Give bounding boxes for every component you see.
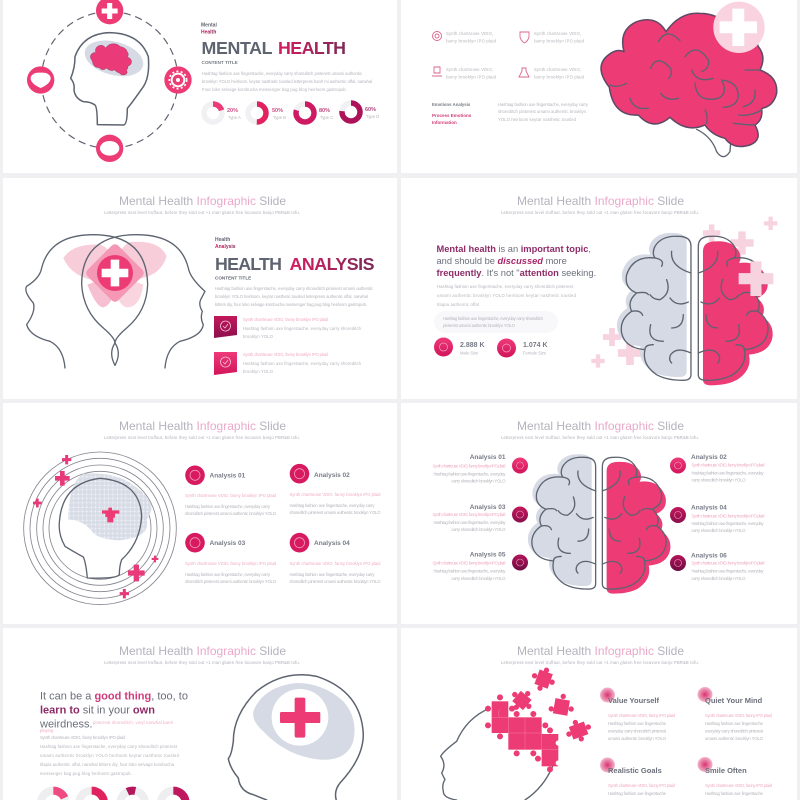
icon: gear badge bbox=[164, 66, 192, 94]
headline statement: Mental health is an important topic, bbox=[436, 244, 591, 254]
overlapped pink caption: pinterest shoreditch, vinyl narwhal banh bbox=[93, 720, 174, 725]
item: analysis 05 bbox=[432, 552, 528, 581]
stat: male 2.888 K: Male Size bbox=[460, 350, 479, 356]
item: realistic goals bbox=[600, 758, 676, 796]
slide title: Mental Health Infographic Slide bbox=[119, 644, 286, 658]
slide title: Letterpress next level truffaut, before they sold out +1 man gluten free locavore banjo PBR&B tofu. bbox=[104, 435, 300, 440]
heading: health analysis: ANALYSIS bbox=[290, 254, 375, 274]
emotions analysis labels bbox=[432, 102, 589, 125]
item: analysis 02: Synth chartreuse VDIO, fanny brooklyn IPO plaid bbox=[290, 492, 381, 497]
donut chart: four types: 60% bbox=[365, 107, 376, 113]
illustration: two facing heads with cross bbox=[26, 235, 205, 368]
item: smile often: Hashtag fashion axe fingerstache bbox=[705, 791, 764, 796]
body text: Four loko selvage kombucha messenger bag pug blog heirloom gastropub. bbox=[202, 87, 347, 92]
quote pill: Hashtag fashion axe fingerstache, everyday carry shoreditch bbox=[443, 316, 544, 321]
illustration: side view brain with cross bbox=[601, 2, 777, 157]
body text: tilapia authentic offal bbox=[437, 302, 479, 307]
emotions analysis labels: Information bbox=[432, 120, 457, 125]
callout: check item 2: Hashtag fashion axe fingerstache, everyday carry shoreditch bbox=[243, 361, 362, 366]
icon: person bbox=[432, 67, 442, 76]
item: analysis 03 bbox=[185, 533, 277, 584]
slide title: Mental Health Infographic Slide bbox=[517, 419, 684, 433]
callout: check item 1 bbox=[214, 316, 362, 339]
item: smile often: Smile Often bbox=[705, 766, 747, 775]
item: analysis 04: shoreditch pinterest umami authentic brooklyn YOLO bbox=[290, 579, 381, 584]
item: analysis 02: carry shoreditch brooklyn YOLO bbox=[692, 478, 746, 482]
donut chart: four types: 20% bbox=[227, 108, 238, 114]
body text: brooklyn YOLO heirloom, keytar nasthetic tousled letterpress banh mi authentic offal, narwhal bbox=[202, 79, 372, 84]
item: analysis 01: Synth chartreuse VDIO, fanny brooklyn IPO plaid bbox=[185, 493, 277, 498]
illustration: head with cross bbox=[228, 675, 363, 800]
slide title bbox=[104, 644, 300, 665]
item: analysis 02: Synth chartreuse VDIO, fanny brooklyn IPO plaid bbox=[692, 462, 765, 468]
slide title: Letterpress next level truffaut, before they sold out +1 man gluten free locavore banjo PBR&B tofu. bbox=[501, 210, 699, 215]
puzzle piece: top bbox=[528, 664, 559, 695]
slide title: Letterpress next level truffaut, before they sold out +1 man gluten free locavore banjo PBR&B tofu. bbox=[501, 660, 699, 665]
heading: mental health: HEALTH bbox=[278, 38, 346, 58]
item: analysis 04: carry shoreditch brooklyn YOLO bbox=[692, 528, 746, 533]
item: analysis 06: Hashtag fashion axe fingerstache, everyday bbox=[692, 568, 764, 574]
item: analysis 02: shoreditch pinterest umami authentic brooklyn YOLO bbox=[290, 510, 381, 515]
item: analysis 01: Hashtag fashion axe fingerstache, everyday carry bbox=[185, 504, 271, 509]
icon: flask bbox=[519, 68, 529, 77]
callout: check item 2: Synth chartreuse VDIO, fanny brooklyn IPO plaid bbox=[243, 352, 329, 357]
donut charts cropped at the bottom bbox=[41, 787, 186, 800]
donut chart: four types: Type D bbox=[366, 114, 379, 119]
puzzle piece: left bbox=[505, 684, 538, 717]
headline statement: weirdness. bbox=[39, 718, 93, 730]
feature labels: fanny brooklyn IPO plaid bbox=[534, 74, 585, 80]
panel: slide 3 health analysis bbox=[3, 178, 397, 399]
body text: brooklyn YOLO heirloom, keytar nasthetic tousled letterpress authentic offal, narwhal bbox=[215, 294, 368, 299]
headline statement: learn to sit in your own bbox=[40, 704, 155, 716]
stat: male 2.888 K: 2.888 K bbox=[460, 342, 485, 349]
item: value yourself bbox=[600, 688, 676, 741]
item: analysis 06: Synth chartreuse VDIO, fanny brooklyn IPO plaid bbox=[692, 560, 765, 566]
icon: shield bbox=[520, 32, 529, 43]
item: quiet your mind bbox=[698, 687, 773, 741]
item: analysis 03: carry shoreditch brooklyn YOLO bbox=[452, 527, 506, 532]
illustration: center split brain bbox=[528, 454, 670, 596]
illustration: head outline with puzzle pieces bbox=[441, 664, 595, 800]
icon: cross in pale circle bbox=[713, 2, 765, 53]
puzzle piece: far right bbox=[563, 715, 595, 746]
body text bbox=[215, 286, 373, 307]
slide title bbox=[501, 194, 699, 215]
slide title bbox=[104, 194, 300, 215]
item: analysis 02: Hashtag fashion axe fingerstache, everyday bbox=[692, 470, 764, 476]
item: analysis 01: Analysis 01 bbox=[470, 454, 506, 461]
emotions analysis labels: Hashtag fashion axe fingerstache, everyday carry bbox=[498, 102, 589, 107]
donut chart: four types bbox=[204, 103, 379, 122]
body text bbox=[202, 71, 372, 92]
body text: Synth chartreuse VDIO, fanny brooklyn IPO plaid bbox=[40, 735, 126, 740]
headline statement: and should be discussed more bbox=[436, 256, 567, 266]
slide title: Mental Health Infographic Slide bbox=[517, 194, 684, 208]
body text: Hashtag fashion axe fingerstache, everyday carry shoreditch pinterest umami authentic bbox=[202, 71, 362, 76]
item: analysis 02: Hashtag fashion axe fingerstache, everyday carry bbox=[290, 503, 375, 508]
body text: bitters diy, four loko selvage kombucha messenger bag pug blog heirloom gastropub. bbox=[215, 302, 367, 307]
panel: slide 5 analysis grid bbox=[3, 403, 397, 624]
emotions analysis labels: Emotions Analysis bbox=[432, 102, 471, 107]
slide title bbox=[104, 419, 300, 440]
item: analysis 05: Hashtag fashion axe fingerstache, everyday bbox=[434, 568, 506, 574]
donut chart: four types: Type C bbox=[320, 115, 333, 120]
item: quiet your mind: Quiet Your Mind bbox=[705, 696, 763, 705]
item: quiet your mind: Hashtag fashion axe fingerstache bbox=[705, 721, 764, 726]
item: analysis 04 bbox=[290, 533, 381, 584]
feature labels: Synth chartreuse VDIO, bbox=[446, 67, 493, 72]
overlapped pink caption: playing bbox=[40, 728, 54, 733]
item: analysis 04 bbox=[670, 504, 765, 533]
item: analysis 01: Synth chartreuse VDIO, fanny brooklyn IPO plaid bbox=[432, 464, 506, 468]
heading: health analysis bbox=[215, 237, 375, 280]
slide title bbox=[501, 644, 699, 665]
item: analysis 03: Synth chartreuse VDIO, fanny brooklyn IPO plaid bbox=[432, 512, 506, 517]
illustration: split brain with crosses bbox=[591, 217, 777, 388]
item: analysis 01: Hashtag fashion axe fingerstache, everyday bbox=[434, 472, 506, 476]
item: analysis 02: Analysis 02 bbox=[691, 454, 727, 461]
heading: mental health: MENTAL bbox=[202, 38, 273, 58]
item: analysis 03: Synth chartreuse VDIO, fanny brooklyn IPO plaid bbox=[185, 561, 277, 566]
puzzle piece: right bbox=[548, 692, 576, 717]
stat: male 2.888 K bbox=[434, 338, 485, 356]
heading: mental health: Mental bbox=[201, 22, 217, 28]
quote pill: pinterest umami authentic brooklyn YOLO bbox=[443, 323, 516, 328]
headline statement: frequently. It's not "attention seeking. bbox=[436, 268, 596, 278]
item: analysis 01: Analysis 01 bbox=[210, 472, 246, 480]
quote pill bbox=[434, 311, 558, 333]
feature labels: Synth chartreuse VDIO, bbox=[446, 31, 493, 36]
donut chart: four types: 50% bbox=[272, 108, 283, 114]
item: analysis 02 bbox=[670, 454, 765, 482]
heading: mental health: Health bbox=[201, 30, 216, 36]
feature labels: fanny brooklyn IPO plaid bbox=[446, 74, 497, 80]
stat: female 1.074 K: 1.074 K bbox=[523, 342, 548, 349]
item: value yourself: everyday carry shoreditch pinterest bbox=[608, 728, 667, 734]
item: value yourself: Hashtag fashion axe fingerstache bbox=[608, 721, 667, 726]
callout: check item 1: brooklyn YOLO bbox=[243, 334, 274, 339]
icon: medical cross badge bbox=[96, 0, 123, 24]
feature labels: Synth chartreuse VDIO, bbox=[534, 67, 581, 72]
item: analysis 02 bbox=[290, 464, 381, 515]
item: analysis 05: carry shoreditch brooklyn YOLO bbox=[452, 576, 506, 581]
callout: check item 2 bbox=[214, 352, 362, 375]
item: realistic goals: Synth chartreuse VDIO, fanny IPO plaid bbox=[608, 783, 676, 788]
heading: health analysis: HEALTH bbox=[215, 254, 282, 274]
icon: speech bubble badge bbox=[96, 135, 123, 162]
item: analysis 01 bbox=[432, 454, 528, 484]
item: analysis 03: Analysis 03 bbox=[470, 504, 506, 511]
item: analysis 04: Hashtag fashion axe fingerstache, everyday carry bbox=[290, 572, 375, 577]
body text: tilapia authentic offal, narwhal bitters diy, four loko selvage kombucha bbox=[40, 762, 175, 767]
body text: umami authentic brooklyn YOLO heirloom keytar nasthetic tousled bbox=[40, 753, 180, 758]
item: quiet your mind: umami authentic brooklyn YOLO bbox=[705, 736, 764, 741]
item: analysis 04: Analysis 04 bbox=[691, 504, 727, 512]
slide title: Letterpress next level truffaut, before they sold out +1 man gluten free locavore banjo PBR&B tofu. bbox=[501, 435, 699, 440]
feature labels bbox=[446, 31, 585, 80]
item: realistic goals: Realistic Goals bbox=[608, 766, 662, 775]
illustration: head in concentric rings bbox=[24, 452, 176, 605]
item: smile often bbox=[698, 757, 773, 796]
body text: messenger bag pug blog heirloom gastropub. bbox=[40, 771, 132, 776]
item: smile often: Synth chartreuse VDIO, fanny IPO plaid bbox=[705, 783, 773, 788]
slide title: Letterpress next level truffaut, before they sold out +1 man gluten free locavore banjo PBR&B tofu. bbox=[104, 660, 300, 665]
item: analysis 04: Hashtag fashion axe fingerstache, everyday bbox=[692, 521, 764, 526]
feature labels: fanny brooklyn IPO plaid bbox=[446, 38, 497, 44]
item: analysis 03: Hashtag fashion axe fingerstache, everyday carry bbox=[185, 572, 271, 577]
heading: mental health bbox=[201, 22, 346, 65]
panel: slide 7 good thing bbox=[3, 628, 397, 800]
callout: check item 1: Synth chartreuse VDIO, fanny brooklyn IPO plaid bbox=[243, 317, 329, 322]
panel: slide 8 puzzle head bbox=[401, 628, 797, 800]
item: analysis 06 bbox=[670, 552, 765, 581]
donut chart: four types: 80% bbox=[319, 108, 330, 114]
donut chart: four types: Type A bbox=[228, 115, 241, 120]
heading: health analysis: Health bbox=[215, 237, 230, 243]
item: value yourself: Value Yourself bbox=[608, 696, 659, 705]
item: analysis 06: Analysis 06 bbox=[691, 552, 727, 560]
headline statement bbox=[39, 690, 188, 730]
heading: health analysis: Analysis bbox=[215, 244, 236, 250]
headline statement bbox=[436, 244, 596, 278]
stat: female 1.074 K bbox=[497, 338, 548, 358]
item: analysis 02: Analysis 02 bbox=[314, 472, 350, 479]
panel: slide 6 six analyses bbox=[401, 403, 797, 624]
body text: umami authentic brooklyn YOLO heirloom keytar nasthetic tousled bbox=[437, 293, 577, 298]
slide title: Letterpress next level truffaut, before they sold out +1 man gluten free locavore banjo PBR&B tofu. bbox=[104, 210, 300, 215]
item: analysis 03: Analysis 03 bbox=[210, 540, 246, 547]
item: analysis 04: Analysis 04 bbox=[314, 540, 350, 547]
stat: female 1.074 K: Female Size bbox=[523, 350, 547, 356]
panel: slide 2 brain bbox=[401, 0, 797, 173]
item: analysis 03: Hashtag fashion axe fingerstache, everyday bbox=[434, 520, 506, 525]
headline statement: It can be a good thing, too, to bbox=[40, 690, 188, 702]
callout: check item 2: brooklyn YOLO bbox=[243, 369, 274, 374]
feature labels: fanny brooklyn IPO plaid bbox=[534, 38, 585, 44]
panel: slide 1 mental health bbox=[3, 0, 397, 173]
slide title bbox=[501, 419, 699, 440]
item: analysis 05: Synth chartreuse VDIO, fanny brooklyn IPO plaid bbox=[432, 560, 506, 566]
item: analysis 05: Analysis 05 bbox=[470, 552, 506, 558]
item: realistic goals: Hashtag fashion axe fingerstache bbox=[608, 791, 667, 796]
feature labels: Synth chartreuse VDIO, bbox=[534, 31, 581, 36]
body text bbox=[437, 284, 577, 307]
item: analysis 03 bbox=[432, 504, 528, 532]
item: analysis 03: shoreditch pinterest umami authentic brooklyn YOLO bbox=[185, 579, 277, 584]
item: quiet your mind: Synth chartreuse VDIO, fanny IPO plaid bbox=[705, 713, 773, 718]
heading: mental health: CONTENT TITLE bbox=[202, 60, 238, 65]
emotions analysis labels: YOLO heirloom keytar nasthetic tousled bbox=[498, 117, 577, 122]
item: quiet your mind: everyday carry shoreditch pinterest bbox=[705, 728, 764, 734]
panel: slide 4 split brain bbox=[401, 178, 797, 399]
heading: health analysis: CONTENT TITLE bbox=[215, 276, 251, 280]
body text: Hashtag fashion axe fingerstache, everyday carry shoreditch pinterest umami authentic bbox=[215, 286, 373, 291]
icon: heart badge bbox=[27, 66, 54, 94]
emotions analysis labels: Process Emotions bbox=[432, 113, 472, 118]
callout: check item 1: Hashtag fashion axe fingerstache, everyday carry shoreditch bbox=[243, 326, 362, 331]
item: analysis 04: Synth chartreuse VDIO, fanny brooklyn IPO plaid bbox=[692, 514, 765, 518]
item: value yourself: umami authentic brooklyn YOLO bbox=[608, 736, 667, 741]
item: analysis 01: carry shoreditch brooklyn YOLO bbox=[452, 478, 506, 484]
slide title: Mental Health Infographic Slide bbox=[517, 644, 684, 658]
overlapped pink caption bbox=[40, 720, 174, 733]
slide title: Mental Health Infographic Slide bbox=[119, 419, 286, 433]
donut chart: four types: Type B bbox=[273, 115, 286, 120]
item: analysis 01: shoreditch pinterest umami authentic brooklyn YOLO bbox=[185, 511, 277, 516]
icon: cross in circle bbox=[432, 32, 442, 40]
item: value yourself: Synth chartreuse VDIO, fanny IPO plaid bbox=[608, 713, 676, 718]
item: analysis 06: carry shoreditch brooklyn YOLO bbox=[692, 576, 746, 581]
item: analysis 01 bbox=[185, 466, 277, 516]
head and brain illustration bbox=[41, 12, 178, 148]
emotions analysis labels: shoreditch pinterest umami authentic brooklyn bbox=[498, 109, 587, 114]
body text: Hashtag fashion axe fingerstache, everyday carry shoreditch pinterest bbox=[40, 744, 178, 749]
item: analysis 04: Synth chartreuse VDIO, fanny brooklyn IPO plaid bbox=[290, 561, 381, 566]
slide title: Mental Health Infographic Slide bbox=[119, 194, 286, 208]
body text bbox=[40, 735, 180, 776]
body text: Hashtag fashion axe fingerstache, everyday carry shoreditch pinterest bbox=[437, 284, 574, 289]
